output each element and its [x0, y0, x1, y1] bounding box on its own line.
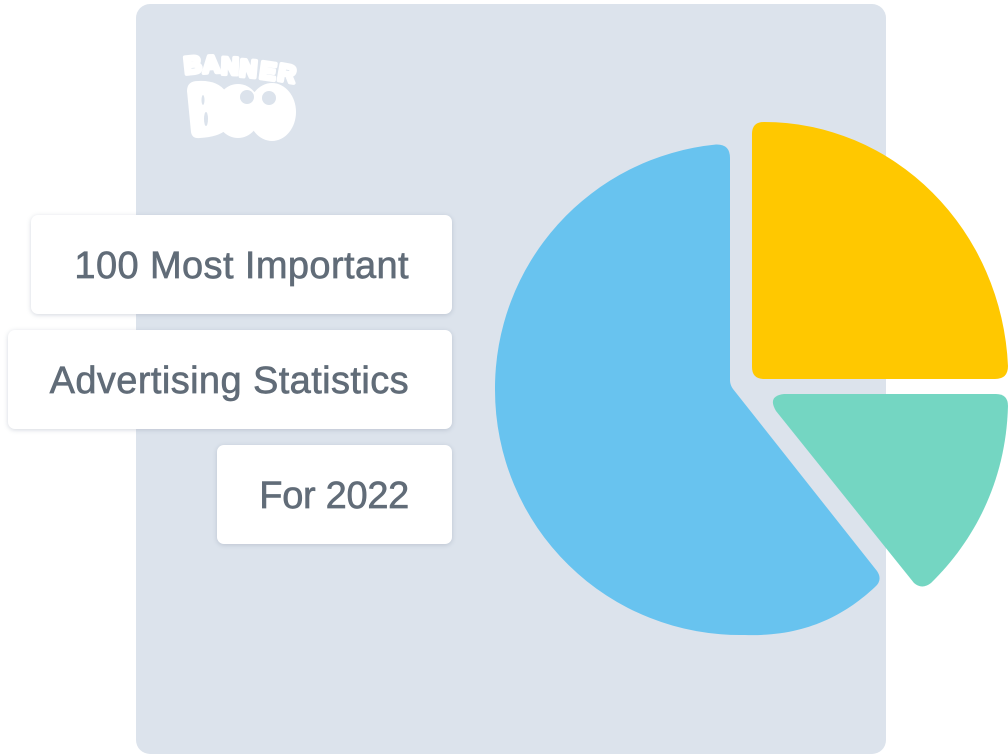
- logo word: BANNER: BANNER: [183, 51, 298, 89]
- title card line 3: For 2022: [259, 474, 409, 516]
- pie slice: blue: [495, 144, 880, 635]
- background panel: [136, 4, 886, 754]
- pie slice: yellow: [752, 122, 1008, 379]
- title card line 1: 100 Most Important: [74, 244, 409, 286]
- title card line 1: [31, 215, 452, 314]
- title card line 2: Advertising Statistics: [50, 360, 409, 402]
- title card line 3: [217, 445, 452, 544]
- logo word: BOO: BOO: [192, 78, 292, 147]
- title card line 2: [8, 330, 452, 428]
- pie slice: teal: [773, 394, 1008, 586]
